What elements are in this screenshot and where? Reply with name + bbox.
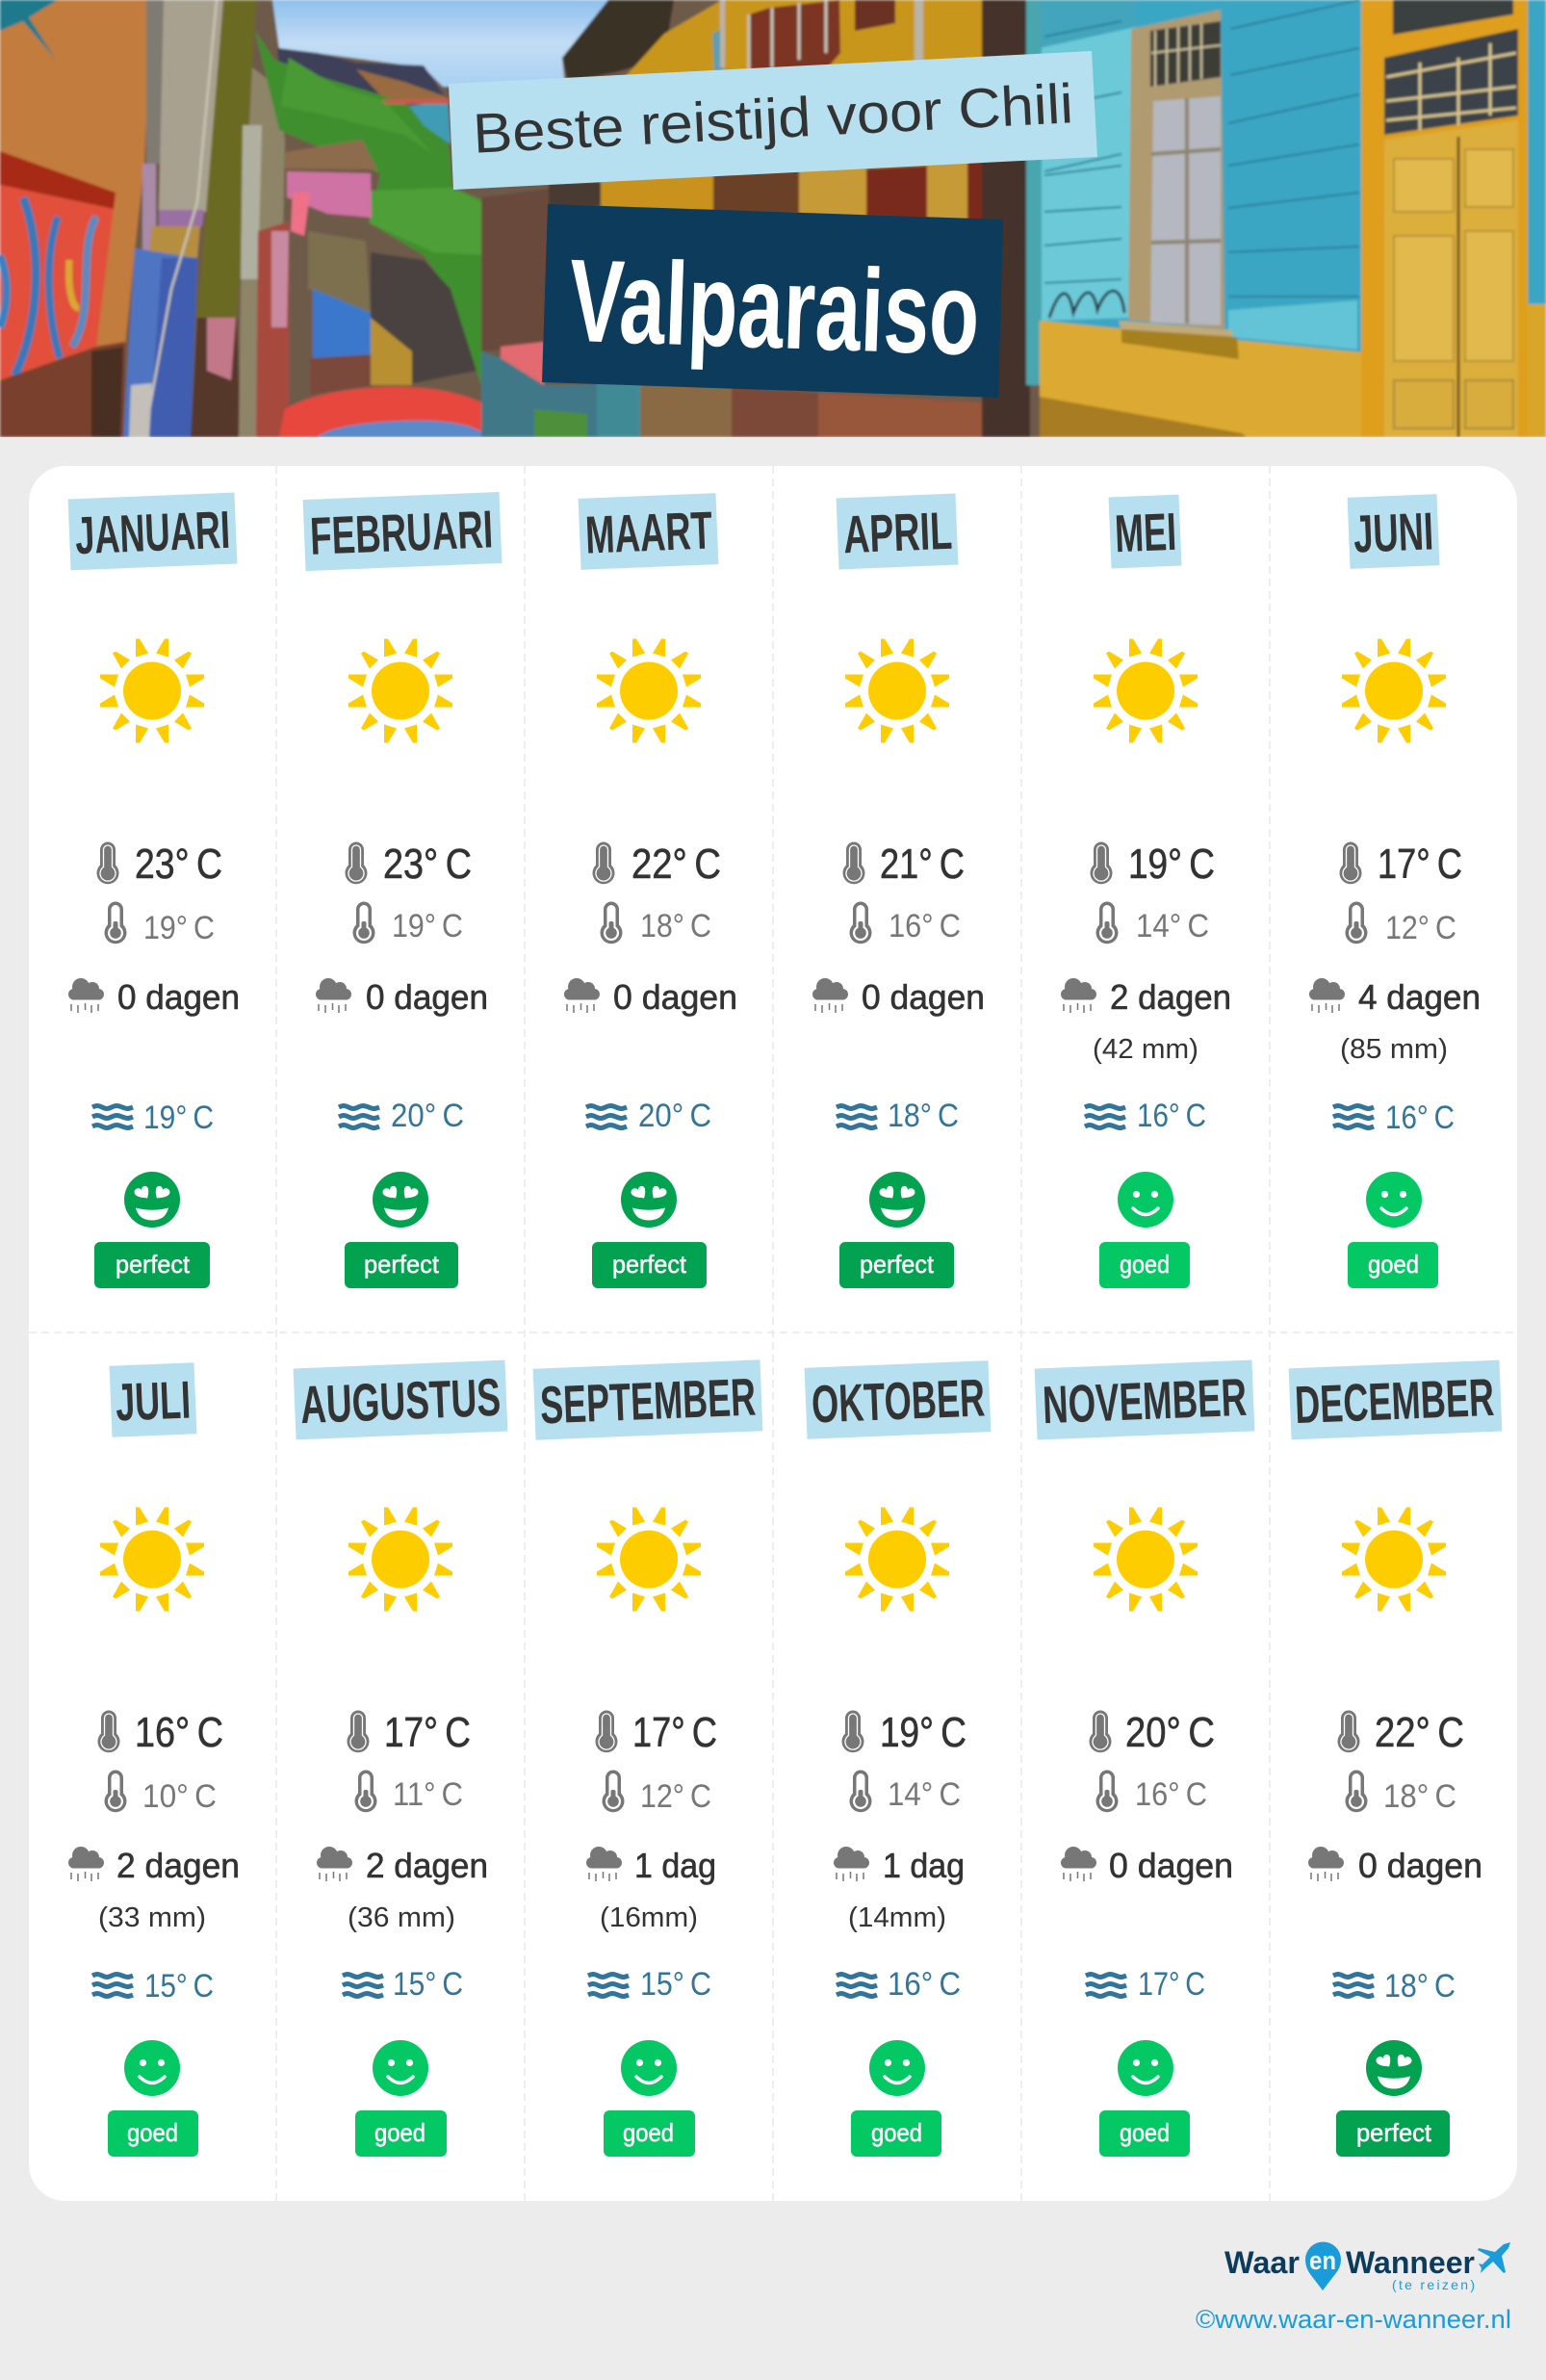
sea temperature: 16° C <box>1137 1098 1206 1134</box>
max temperature: 20° C <box>1125 1709 1215 1756</box>
icon: waves <box>837 1105 877 1128</box>
sea temperature: 18° C <box>888 1098 959 1134</box>
month: juni <box>1309 494 1481 1288</box>
icon: min thermometer <box>601 901 622 944</box>
month label: NOVEMBER <box>1042 1367 1248 1435</box>
sea temperature: 15° C <box>144 1968 214 2005</box>
min temperature: 11° C <box>393 1776 463 1813</box>
icon: rain cloud <box>1061 978 1096 1013</box>
badge good: goed <box>871 2118 922 2147</box>
month label: SEPTEMBER <box>539 1367 757 1435</box>
rainfall: (42 mm) <box>1093 1034 1198 1065</box>
month label <box>1109 495 1181 568</box>
icon: max thermometer <box>843 841 864 884</box>
icon: waves <box>1333 1974 1374 1997</box>
rain days: 2 dagen <box>1110 977 1231 1017</box>
rain days: 0 dagen <box>1358 1846 1482 1885</box>
city banner: Valparaiso: Valparaiso <box>567 235 982 379</box>
month: september <box>533 1359 762 2157</box>
badge good: goed <box>1120 1250 1170 1279</box>
month: oktober <box>805 1360 991 2157</box>
icon: rain cloud <box>316 978 351 1013</box>
rain days: 0 dagen <box>117 977 240 1017</box>
rain days: 0 dagen <box>613 977 737 1017</box>
month: november <box>1035 1359 1254 2157</box>
badge good: goed <box>1120 2118 1170 2147</box>
icon: min thermometer <box>1346 1770 1367 1812</box>
badge good <box>108 2110 198 2157</box>
icon: min thermometer <box>849 901 872 944</box>
min temperature: 14° C <box>1136 908 1209 944</box>
icon: min thermometer <box>352 901 375 944</box>
icon: smiley good <box>1366 1172 1422 1228</box>
month label <box>1035 1359 1254 1440</box>
max temperature: 17° C <box>1378 841 1462 888</box>
copyright url: ©www.waar-en-wanneer.nl <box>1196 2305 1511 2334</box>
icon: rain cloud <box>564 978 600 1013</box>
month: maart <box>564 493 737 1288</box>
rain days: 0 dagen <box>862 977 985 1017</box>
month label <box>837 494 958 569</box>
month label <box>303 492 502 571</box>
logo: Waar en Wanneer: en <box>1309 2246 1336 2275</box>
badge perfect <box>1336 2110 1450 2157</box>
icon: smiley good <box>1118 1172 1173 1228</box>
min temperature: 18° C <box>1383 1778 1456 1815</box>
month label <box>533 1359 762 1440</box>
min temperature: 12° C <box>640 1778 711 1815</box>
month label: OKTOBER <box>811 1367 986 1435</box>
icon: rain cloud <box>586 1847 622 1881</box>
icon: sun <box>597 1508 701 1612</box>
icon: max thermometer <box>1090 841 1113 884</box>
logo: Waar en Wanneer <box>1224 2241 1510 2292</box>
icon: sun <box>1342 1508 1446 1612</box>
min temperature: 10° C <box>142 1778 217 1815</box>
icon: smiley good <box>373 2040 428 2096</box>
icon: smiley good <box>124 2040 180 2096</box>
icon: rain cloud <box>68 1847 104 1881</box>
month: februari <box>303 492 502 1288</box>
month: december <box>1289 1360 1502 2157</box>
icon: sun <box>845 639 949 743</box>
rain days: 0 dagen <box>366 977 488 1017</box>
title banner: Beste reistijd voor Chili: Beste reistijd voor Chili <box>472 72 1074 166</box>
max temperature: 23° C <box>383 841 472 888</box>
icon: waves <box>343 1974 383 1997</box>
min temperature: 16° C <box>1135 1776 1207 1813</box>
month label: FEBRUARI <box>309 499 494 566</box>
rainfall: (33 mm) <box>98 1902 206 1933</box>
icon: max thermometer <box>1090 1710 1111 1752</box>
sea temperature: 15° C <box>640 1966 711 2003</box>
month label: MAART <box>584 500 713 565</box>
badge perfect <box>839 1242 954 1288</box>
panel: months grid <box>29 466 1517 2201</box>
month label: JULI <box>115 1369 192 1433</box>
icon: smiley perfect <box>869 1172 925 1228</box>
icon: rain cloud <box>1309 978 1345 1013</box>
badge good <box>851 2110 941 2157</box>
icon: waves <box>1085 1105 1125 1128</box>
icon: min thermometer <box>849 1770 872 1812</box>
max temperature: 22° C <box>1375 1709 1464 1756</box>
rainfall: (36 mm) <box>348 1902 455 1933</box>
icon: sun <box>1094 639 1198 743</box>
sea temperature: 15° C <box>393 1966 463 2003</box>
icon: waves <box>837 1974 877 1997</box>
header photo: colourful street in Valparaiso <box>0 0 1546 437</box>
badge perfect: perfect <box>116 1250 191 1279</box>
icon: max thermometer <box>593 841 614 884</box>
max temperature: 16° C <box>135 1709 223 1756</box>
icon: waves <box>92 1974 133 1997</box>
icon: rain cloud <box>1308 1847 1344 1881</box>
sea temperature: 17° C <box>1138 1966 1205 2003</box>
month label: JANUARI <box>74 500 231 565</box>
logo: Waar en Wanneer: (te reizen) <box>1392 2277 1475 2292</box>
rainfall: (16mm) <box>600 1902 698 1933</box>
badge good: goed <box>1368 1250 1419 1279</box>
rain days: 0 dagen <box>1109 1846 1233 1885</box>
icon: smiley perfect <box>1366 2040 1422 2096</box>
icon: sun <box>1342 639 1446 743</box>
min temperature: 19° C <box>143 910 215 946</box>
badge good <box>1348 1242 1438 1288</box>
title banner: Beste reistijd voor Chili <box>449 51 1097 190</box>
sea temperature: 19° C <box>143 1099 214 1136</box>
sea temperature: 16° C <box>1385 1099 1455 1136</box>
badge perfect <box>94 1242 210 1288</box>
month: januari <box>68 493 240 1288</box>
icon: max thermometer <box>347 1710 370 1752</box>
icon: smiley perfect <box>373 1172 428 1228</box>
icon: min thermometer <box>603 1770 624 1812</box>
month: april <box>812 494 985 1288</box>
month label <box>1348 494 1439 569</box>
min temperature: 14° C <box>888 1776 961 1813</box>
icon: waves <box>1333 1105 1374 1128</box>
badge perfect <box>345 1242 458 1288</box>
icon: min thermometer <box>1095 901 1119 944</box>
icon: max thermometer <box>345 841 368 884</box>
min temperature: 19° C <box>392 908 463 944</box>
rain days: 4 dagen <box>1358 977 1481 1017</box>
icon: smiley perfect <box>124 1172 180 1228</box>
max temperature: 23° C <box>135 841 222 888</box>
icon: smiley perfect <box>621 1172 677 1228</box>
min temperature: 16° C <box>889 908 961 944</box>
rain days: 1 dag <box>634 1846 716 1885</box>
icon: min thermometer <box>1346 901 1367 944</box>
icon: waves <box>339 1105 379 1128</box>
icon: rain cloud <box>68 978 104 1013</box>
icon: min thermometer <box>104 901 127 944</box>
icon: rain cloud <box>812 978 848 1013</box>
city banner: Valparaiso <box>542 204 1003 398</box>
icon: smiley good <box>869 2040 925 2096</box>
icon: sun <box>100 1508 204 1612</box>
badge good <box>1099 2110 1190 2157</box>
icon: waves <box>92 1105 133 1128</box>
icon: sun <box>348 1508 452 1612</box>
min temperature: 12° C <box>1385 910 1456 946</box>
icon: max thermometer <box>595 1710 618 1752</box>
icon: min thermometer <box>104 1770 127 1812</box>
icon: map pin <box>1305 2241 1341 2290</box>
sea temperature: 20° C <box>391 1098 464 1134</box>
icon: max thermometer <box>841 1710 864 1752</box>
icon: min thermometer <box>354 1770 377 1812</box>
month: augustus <box>294 1360 507 2157</box>
icon: waves <box>588 1974 629 1997</box>
sea temperature: 16° C <box>888 1966 961 2003</box>
badge good: goed <box>623 2118 674 2147</box>
badge perfect: perfect <box>612 1250 687 1279</box>
icon: sun <box>348 639 452 743</box>
icon: smiley good <box>621 2040 677 2096</box>
badge perfect: perfect <box>860 1250 935 1279</box>
max temperature: 19° C <box>880 1709 966 1756</box>
badge good: goed <box>127 2118 178 2147</box>
month label <box>805 1360 991 1439</box>
icon: rain cloud <box>1061 1847 1096 1881</box>
month label: APRIL <box>842 501 953 564</box>
icon: rain cloud <box>317 1847 352 1881</box>
month: mei <box>1061 495 1231 1288</box>
month label <box>579 493 718 570</box>
icon: waves <box>1086 1974 1126 1997</box>
icon: min thermometer <box>1095 1770 1119 1812</box>
icon: max thermometer <box>98 1710 119 1752</box>
icon: sun <box>845 1508 949 1612</box>
rain days: 2 dagen <box>116 1846 240 1885</box>
rainfall: (85 mm) <box>1340 1034 1448 1065</box>
rainfall: (14mm) <box>848 1902 946 1933</box>
icon: max thermometer <box>96 841 119 884</box>
icon: rain cloud <box>834 1847 869 1881</box>
logo: Waar en Wanneer: Waar <box>1224 2245 1300 2280</box>
badge good <box>355 2110 447 2157</box>
sea temperature: 20° C <box>638 1098 711 1134</box>
badge perfect <box>592 1242 707 1288</box>
month: juli <box>68 1362 240 2157</box>
month label: MEI <box>1114 502 1177 563</box>
max temperature: 22° C <box>631 841 721 888</box>
month label: JUNI <box>1353 501 1434 564</box>
month label <box>294 1360 507 1439</box>
badge good: goed <box>374 2118 425 2147</box>
max temperature: 17° C <box>632 1709 717 1756</box>
icon: sun <box>597 639 701 743</box>
icon: smiley good <box>1118 2040 1173 2096</box>
month label: AUGUSTUS <box>299 1367 502 1435</box>
month label <box>68 493 237 570</box>
rain days: 1 dag <box>883 1846 965 1885</box>
logo: Waar en Wanneer: Wanneer <box>1346 2245 1475 2280</box>
max temperature: 17° C <box>384 1709 471 1756</box>
sea temperature: 18° C <box>1384 1968 1456 2005</box>
icon: max thermometer <box>1340 841 1361 884</box>
badge good <box>604 2110 695 2157</box>
min temperature: 18° C <box>640 908 711 944</box>
icon: max thermometer <box>1338 1710 1359 1752</box>
max temperature: 21° C <box>880 841 965 888</box>
max temperature: 19° C <box>1128 841 1215 888</box>
month label <box>110 1362 196 1437</box>
icon: sun <box>100 639 204 743</box>
icon: airplane <box>1478 2242 1510 2273</box>
rain days: 2 dagen <box>366 1846 488 1885</box>
icon: waves <box>586 1105 627 1128</box>
badge perfect: perfect <box>364 1250 440 1279</box>
icon: sun <box>1094 1508 1198 1612</box>
badge good <box>1099 1242 1190 1288</box>
badge perfect: perfect <box>1356 2118 1432 2147</box>
